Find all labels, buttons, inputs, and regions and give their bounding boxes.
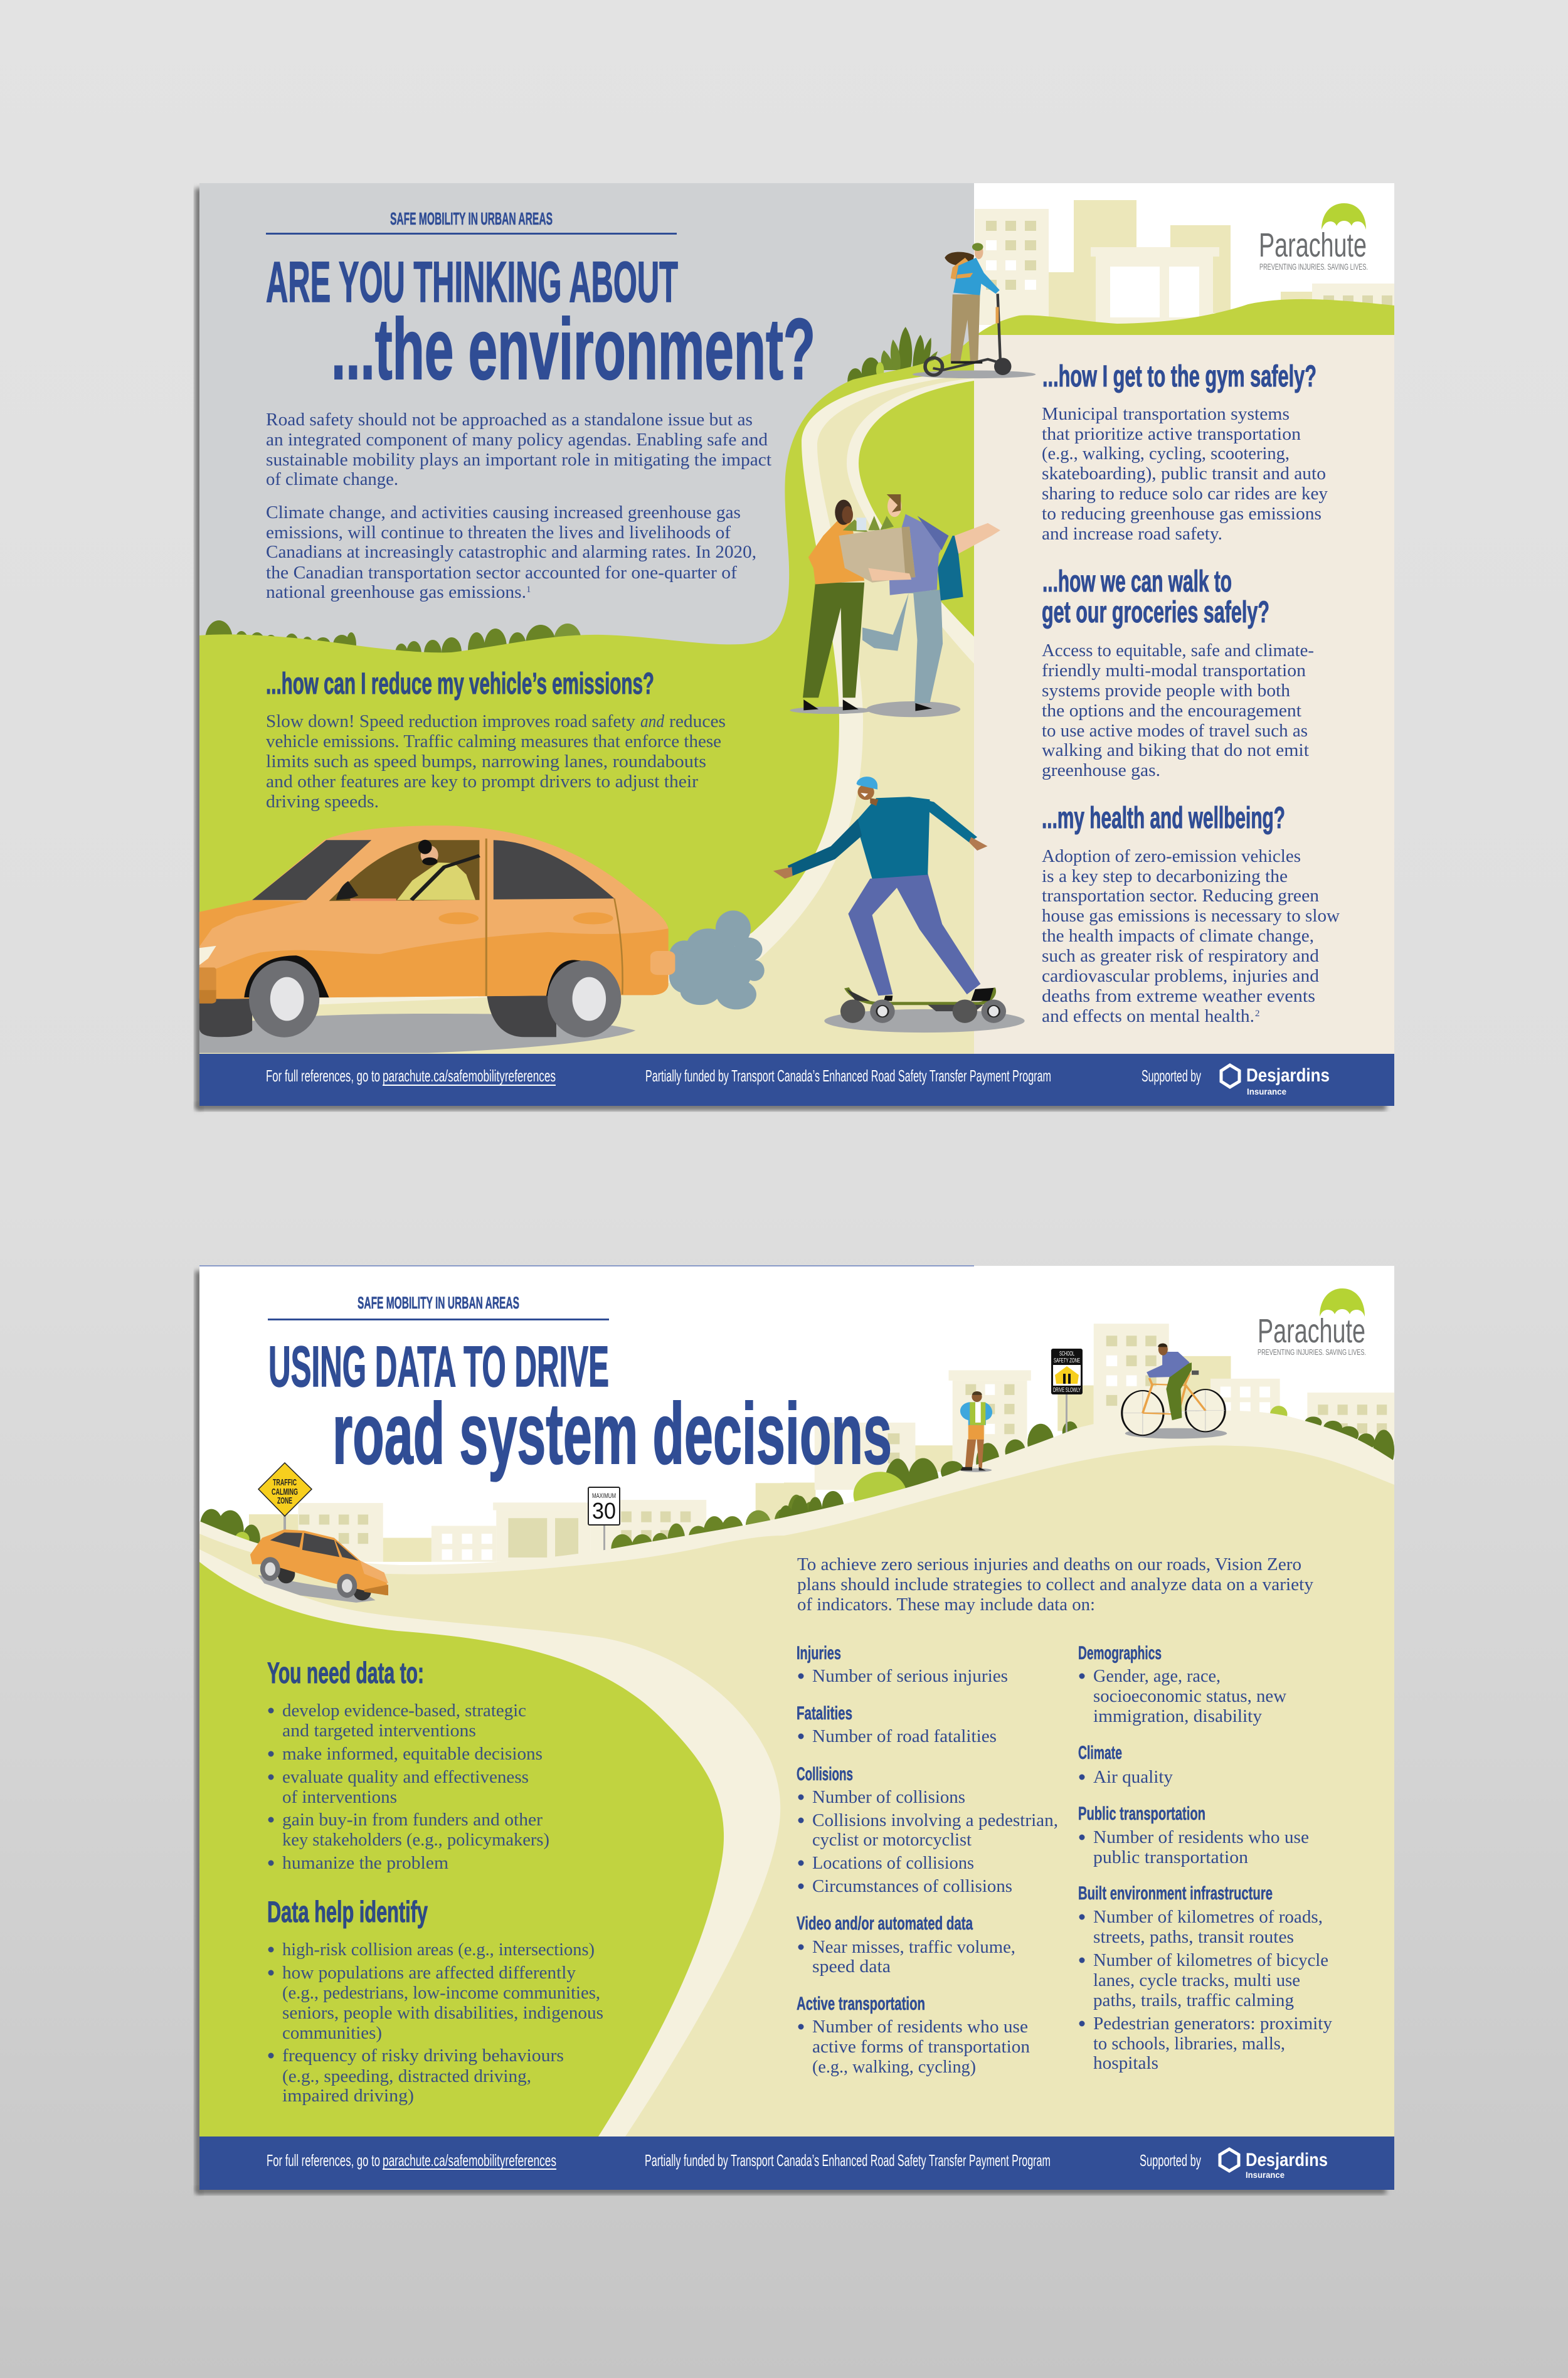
title bbox=[266, 250, 815, 398]
section: you need data to: You need data to: bbox=[267, 1656, 424, 1689]
sign: school zone: DRIVE SLOWLY bbox=[1053, 1387, 1081, 1394]
data indicators right column: Demographics bbox=[1078, 1643, 1162, 1664]
section: groceries: the options and the encouragement bbox=[1042, 701, 1301, 721]
section: data help identify: seniors, people with disabilities, indigenous bbox=[282, 2004, 603, 2023]
funding statement: Partially funded by Transport Canada’s Enhanced Road Safety Transfer Payment Program bbox=[645, 2151, 1051, 2170]
section: health: cardiovascular problems, injuries and bbox=[1042, 967, 1319, 986]
sign: maximum 30: MAXIMUM bbox=[592, 1492, 616, 1500]
section: data help identify: Data help identify bbox=[267, 1895, 428, 1928]
logo: Parachute: PREVENTING INJURIES. SAVING LIVES. bbox=[1258, 1347, 1366, 1357]
sponsor: Insurance bbox=[1247, 1086, 1286, 1096]
sign: traffic calming zone: TRAFFIC bbox=[273, 1477, 297, 1488]
data indicators right column bbox=[1078, 1643, 1332, 2073]
section: gym: (e.g., walking, cycling, scootering, bbox=[1042, 444, 1290, 464]
kicker bbox=[266, 209, 677, 235]
intro text: plans should include strategies to collect and analyze data on a variety bbox=[797, 1575, 1313, 1595]
section: health: and effects on mental health. bbox=[1042, 1007, 1254, 1026]
section: vehicle emissions: Slow down! Speed reduction improves road safety bbox=[266, 712, 635, 731]
icon: standing pedestrian bbox=[960, 1391, 992, 1472]
section: you need data to: develop evidence-based, strategic bbox=[282, 1701, 526, 1721]
title: USING DATA TO DRIVE bbox=[268, 1335, 609, 1399]
sign: school zone: SAFETY ZONE bbox=[1054, 1357, 1080, 1364]
title: ARE YOU THINKING ABOUT bbox=[266, 250, 678, 314]
logo: Parachute: Parachute bbox=[1258, 1312, 1365, 1350]
section: data help identify: impaired driving) bbox=[282, 2086, 414, 2106]
kicker: SAFE MOBILITY IN URBAN AREAS bbox=[390, 209, 553, 228]
panel: environment bbox=[195, 183, 1394, 1110]
sponsor bbox=[1142, 1065, 1330, 1096]
icon: person on skateboard bbox=[773, 777, 1025, 1032]
bushes near scooter bbox=[847, 327, 938, 393]
icon: person on scooter bbox=[913, 243, 1036, 378]
sign: maximum 30: 30 bbox=[592, 1498, 616, 1524]
section: vehicle emissions: ...how can I reduce my vehicle’s emissions? bbox=[266, 667, 654, 701]
references link: parachute.ca/safemobilityreferences bbox=[383, 1066, 556, 1085]
data indicators left column: active forms of transportation bbox=[812, 2037, 1030, 2057]
references link bbox=[267, 2151, 556, 2170]
data indicators right column: Built environment infrastructure bbox=[1078, 1883, 1273, 1904]
data indicators right column: paths, trails, traffic calming bbox=[1093, 1991, 1294, 2010]
data indicators left column: cyclist or motorcyclist bbox=[812, 1830, 972, 1850]
intro text: Canadians at increasingly catastrophic and alarming rates. In 2020, bbox=[266, 543, 756, 562]
data indicators left column: Number of serious injuries bbox=[812, 1667, 1008, 1686]
data indicators left column: Active transportation bbox=[797, 1993, 925, 2014]
data indicators left column: Fatalities bbox=[797, 1703, 852, 1724]
section: gym: Municipal transportation systems bbox=[1042, 405, 1290, 424]
data indicators right column: Number of kilometres of bicycle bbox=[1093, 1951, 1328, 1970]
icon: small orange car bbox=[250, 1529, 388, 1603]
section: vehicle emissions: and bbox=[640, 712, 665, 731]
references link: For full references, go to bbox=[266, 1066, 380, 1085]
data indicators left column: Number of road fatalities bbox=[812, 1727, 997, 1746]
section: you need data to: make informed, equitable decisions bbox=[282, 1744, 543, 1764]
section: health: deaths from extreme weather events bbox=[1042, 987, 1315, 1006]
data indicators right column: Air quality bbox=[1093, 1768, 1173, 1787]
section: vehicle emissions bbox=[266, 667, 726, 812]
section: you need data to: humanize the problem bbox=[282, 1854, 448, 1873]
section: vehicle emissions: and other features are key to prompt drivers to adjust their bbox=[266, 772, 699, 792]
title bbox=[268, 1335, 892, 1482]
sponsor: Desjardins bbox=[1246, 2150, 1328, 2170]
section: health bbox=[1042, 802, 1340, 1026]
data indicators left column: (e.g., walking, cycling) bbox=[812, 2057, 976, 2077]
references link: For full references, go to bbox=[267, 2151, 380, 2170]
data indicators left column: speed data bbox=[812, 1957, 891, 1977]
city buildings right bbox=[784, 1324, 1394, 1509]
section: health: 2 bbox=[1255, 1009, 1259, 1019]
sign: traffic calming zone: CALMING bbox=[272, 1487, 298, 1497]
panel: data bbox=[195, 1265, 1394, 2194]
data indicators right column: Pedestrian generators: proximity bbox=[1093, 2014, 1332, 2034]
section: groceries bbox=[1042, 565, 1314, 780]
bushes right bbox=[779, 1406, 1394, 1534]
section: groceries: friendly multi-modal transportation bbox=[1042, 661, 1306, 681]
data indicators right column: hospitals bbox=[1093, 2054, 1158, 2073]
intro text: emissions, will continue to threaten the lives and livelihoods of bbox=[266, 523, 731, 543]
data indicators left column: Near misses, traffic volume, bbox=[812, 1938, 1015, 1957]
section: data help identify: high-risk collision areas (e.g., intersections) bbox=[282, 1940, 595, 1960]
section: you need data to bbox=[267, 1656, 549, 1873]
section: groceries: to use active modes of travel such as bbox=[1042, 721, 1308, 741]
section: data help identify: communities) bbox=[282, 2024, 382, 2043]
data indicators right column: streets, paths, transit routes bbox=[1093, 1928, 1294, 1947]
logo: Parachute: Parachute bbox=[1259, 226, 1367, 264]
icon: cyclist bbox=[1122, 1344, 1227, 1439]
section: groceries: get our groceries safely? bbox=[1042, 596, 1269, 629]
data indicators right column: Gender, age, race, bbox=[1093, 1667, 1221, 1686]
intro text: the Canadian transportation sector accounted for one-quarter of bbox=[266, 563, 738, 583]
intro text: 1 bbox=[526, 585, 531, 595]
section: health: ...my health and wellbeing? bbox=[1042, 802, 1285, 835]
data indicators right column: to schools, libraries, malls, bbox=[1093, 2034, 1285, 2054]
intro text: sustainable mobility plays an important role in mitigating the impact bbox=[266, 450, 771, 470]
data indicators right column: public transportation bbox=[1093, 1848, 1248, 1867]
section: you need data to: of interventions bbox=[282, 1788, 397, 1807]
section: health: such as greater risk of respiratory and bbox=[1042, 947, 1319, 966]
logo: Parachute bbox=[1258, 1288, 1366, 1357]
sign: maximum 30 bbox=[588, 1487, 620, 1553]
section: groceries: walking and biking that do not emit bbox=[1042, 741, 1309, 760]
sponsor: Supported by bbox=[1140, 2151, 1201, 2170]
data indicators left column: Number of collisions bbox=[812, 1788, 965, 1807]
intro text: national greenhouse gas emissions. bbox=[266, 583, 526, 602]
references link: parachute.ca/safemobilityreferences bbox=[383, 2151, 556, 2170]
city buildings left bbox=[249, 1483, 815, 1563]
section: gym: ...how I get to the gym safely? bbox=[1042, 360, 1316, 393]
data indicators left column: Video and/or automated data bbox=[797, 1913, 973, 1934]
sponsor bbox=[1140, 2149, 1328, 2180]
winding road bbox=[199, 372, 974, 1054]
data indicators left column: Injuries bbox=[797, 1643, 841, 1664]
section: health: the health impacts of climate change, bbox=[1042, 926, 1314, 946]
section: groceries: Access to equitable, safe and climate- bbox=[1042, 641, 1314, 661]
bushes left bbox=[200, 1495, 818, 1563]
section: data help identify: how populations are affected differently bbox=[282, 1963, 576, 1983]
intro text: To achieve zero serious injuries and deaths on our roads, Vision Zero bbox=[797, 1555, 1301, 1574]
section: gym: sharing to reduce solo car rides are key bbox=[1042, 484, 1328, 504]
green hill bbox=[199, 299, 1394, 1054]
sponsor: Insurance bbox=[1246, 2170, 1285, 2180]
data indicators right column: Number of residents who use bbox=[1093, 1828, 1309, 1847]
intro text bbox=[797, 1555, 1313, 1615]
section: data help identify bbox=[267, 1895, 603, 2106]
section: you need data to: evaluate quality and effectiveness bbox=[282, 1768, 529, 1787]
sponsor: Supported by bbox=[1142, 1066, 1201, 1085]
data indicators left column bbox=[797, 1643, 1058, 2077]
section: you need data to: and targeted interventions bbox=[282, 1721, 476, 1741]
data indicators right column: lanes, cycle tracks, multi use bbox=[1093, 1971, 1300, 1990]
kicker bbox=[268, 1293, 609, 1320]
icon: two people with groceries bbox=[790, 494, 1000, 717]
section: health: transportation sector. Reducing green bbox=[1042, 886, 1319, 906]
footer bar bbox=[199, 2136, 1394, 2190]
data indicators right column: Climate bbox=[1078, 1743, 1122, 1763]
section: groceries: systems provide people with both bbox=[1042, 681, 1290, 701]
icon: exhaust smoke bbox=[669, 911, 765, 1009]
section: groceries: ...how we can walk to bbox=[1042, 565, 1232, 598]
section: health: Adoption of zero-emission vehicles bbox=[1042, 847, 1301, 866]
logo: Parachute bbox=[1259, 203, 1368, 272]
right column background bbox=[974, 335, 1394, 1054]
intro text: of climate change. bbox=[266, 470, 398, 489]
section: vehicle emissions: limits such as speed bumps, narrowing lanes, roundabouts bbox=[266, 752, 706, 772]
bushes on hill bbox=[205, 620, 581, 667]
section: vehicle emissions: vehicle emissions. Traffic calming measures that enforce these bbox=[266, 732, 721, 751]
references link bbox=[266, 1066, 556, 1086]
data indicators right column: Public transportation bbox=[1078, 1803, 1205, 1824]
data indicators left column: Locations of collisions bbox=[812, 1854, 974, 1873]
section: data help identify: frequency of risky driving behaviours bbox=[282, 2046, 564, 2066]
funding statement: Partially funded by Transport Canada’s Enhanced Road Safety Transfer Payment Program bbox=[645, 1066, 1051, 1085]
icon: orange car with driver bbox=[199, 825, 675, 1053]
data indicators left column: Circumstances of collisions bbox=[812, 1877, 1012, 1896]
section: you need data to: gain buy-in from funders and other bbox=[282, 1810, 543, 1830]
sign: traffic calming zone: ZONE bbox=[277, 1495, 292, 1506]
data indicators left column: Collisions involving a pedestrian, bbox=[812, 1811, 1058, 1830]
section: vehicle emissions: reduces bbox=[669, 712, 726, 731]
section: vehicle emissions: driving speeds. bbox=[266, 792, 379, 812]
sign: traffic calming zone bbox=[258, 1463, 312, 1533]
data indicators left column: Collisions bbox=[797, 1764, 853, 1785]
section: data help identify: (e.g., speeding, distracted driving, bbox=[282, 2067, 531, 2086]
data indicators right column: socioeconomic status, new bbox=[1093, 1687, 1287, 1706]
section: groceries: greenhouse gas. bbox=[1042, 761, 1160, 780]
intro text: an integrated component of many policy agendas. Enabling safe and bbox=[266, 430, 768, 450]
data indicators left column: Number of residents who use bbox=[812, 2017, 1028, 2037]
data indicators right column: Number of kilometres of roads, bbox=[1093, 1908, 1323, 1927]
section: health: house gas emissions is necessary to slow bbox=[1042, 906, 1340, 926]
section: gym: that prioritize active transportation bbox=[1042, 425, 1301, 444]
footer bar bbox=[199, 1054, 1394, 1106]
sponsor: Desjardins bbox=[1246, 1065, 1330, 1086]
sign: school zone bbox=[1051, 1349, 1083, 1433]
section: data help identify: (e.g., pedestrians, low-income communities, bbox=[282, 1983, 600, 2003]
section: health: is a key step to decarbonizing the bbox=[1042, 867, 1288, 886]
section: gym: to reducing greenhouse gas emissions bbox=[1042, 504, 1322, 524]
rolling road and land bbox=[199, 1411, 1394, 2136]
city buildings bbox=[975, 200, 1394, 326]
data indicators right column: immigration, disability bbox=[1093, 1707, 1262, 1726]
intro text bbox=[266, 410, 771, 602]
sign: school zone: SCHOOL bbox=[1059, 1351, 1074, 1357]
title: road system decisions bbox=[332, 1386, 892, 1482]
section: gym: skateboarding), public transit and auto bbox=[1042, 464, 1326, 484]
title: ...the environment? bbox=[331, 301, 815, 398]
intro text: Road safety should not be approached as a standalone issue but as bbox=[266, 410, 753, 430]
intro text: of indicators. These may include data on: bbox=[797, 1595, 1095, 1615]
kicker: SAFE MOBILITY IN URBAN AREAS bbox=[358, 1293, 519, 1312]
section: gym: and increase road safety. bbox=[1042, 524, 1222, 544]
section: gym bbox=[1042, 360, 1328, 544]
logo: Parachute: PREVENTING INJURIES. SAVING LIVES. bbox=[1259, 262, 1368, 272]
section: you need data to: key stakeholders (e.g., policymakers) bbox=[282, 1830, 549, 1850]
intro text: Climate change, and activities causing increased greenhouse gas bbox=[266, 503, 741, 523]
